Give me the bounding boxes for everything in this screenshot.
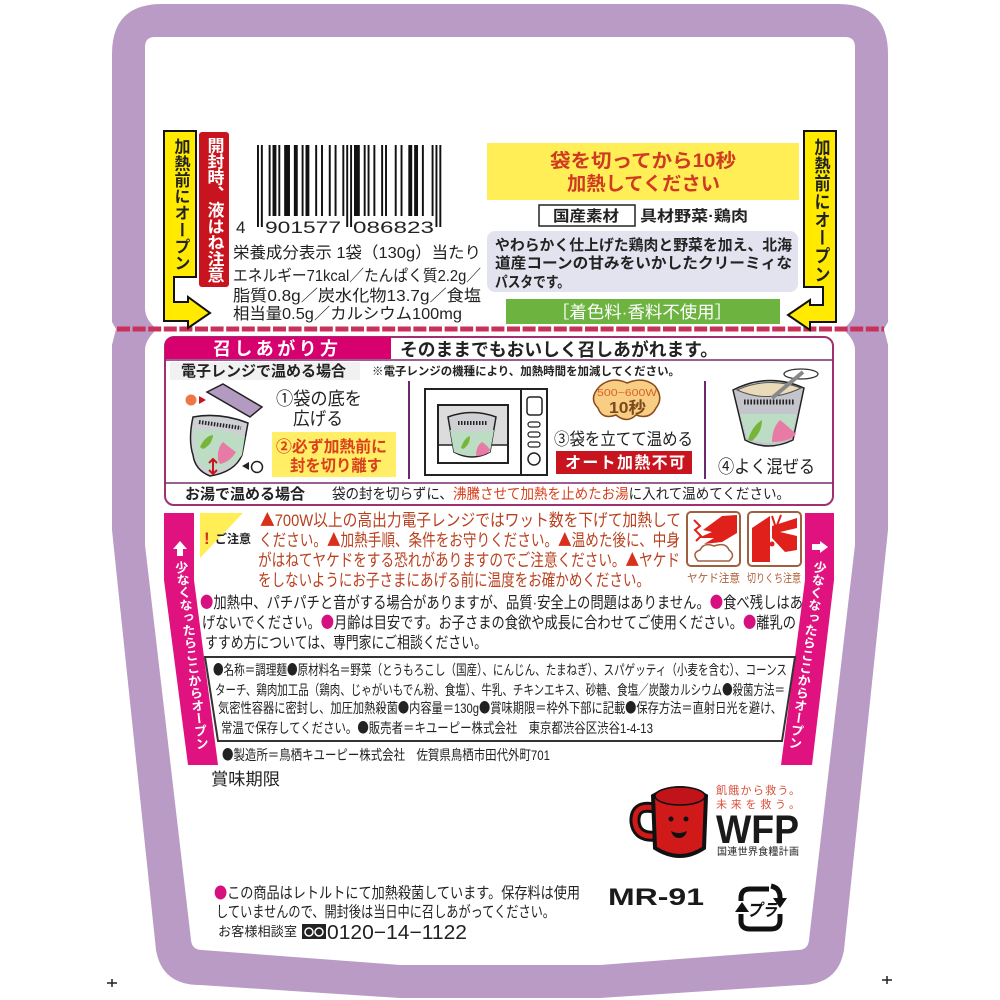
barcode: 4 xyxy=(236,218,245,237)
customer service phone: 0120−14−1122 xyxy=(327,922,467,944)
heating time cloud: 500~600W xyxy=(597,388,658,399)
microwave note: ※電子レンジの機種により、加熱時間を加減してください。 xyxy=(372,364,680,378)
left open arrow xyxy=(164,131,210,328)
pouch frame xyxy=(112,4,888,998)
icon labels: ヤケド注意 xyxy=(687,572,740,585)
best before label: 賞味期限 xyxy=(211,770,280,789)
usage notes xyxy=(200,589,803,652)
step 2 callout: 封を切り離す xyxy=(290,457,382,475)
caution flag: ! xyxy=(204,529,210,548)
caution flag xyxy=(200,513,251,558)
splash warning label xyxy=(199,132,229,287)
barcode xyxy=(236,145,441,237)
product description: パスタです。 xyxy=(495,274,570,291)
icon: sharp edge warning xyxy=(748,512,801,566)
right open strip: 少なくなったらここからオープン xyxy=(786,559,828,750)
icon labels xyxy=(687,572,801,585)
icon: plastic recycling mark: プラ xyxy=(747,901,778,920)
retort note: していませんので、開封後は当日中に召しあがってください。 xyxy=(216,903,555,921)
ingredient box: ●名称＝調理麺●原材料名＝野菜（とうもろこし（国産）、にんじん、たまねぎ）、スパゲッティ（小麦を含む）、コーンス xyxy=(213,660,787,680)
ingredient box: ターチ、鶏肉加工品（鶏肉、じゃがいもでん粉、食塩）、牛乳、チキンエキス、砂糖、食塩／炭酸カルシウム●殺菌方法＝ xyxy=(215,680,785,700)
splash warning label: 開封時、液はね注意 xyxy=(204,137,224,283)
WFP logo text xyxy=(716,783,800,858)
caution flag: ご注意 xyxy=(215,531,251,546)
no auto heating label: オート加熱不可 xyxy=(565,454,685,472)
caution text: ください。▲加熱手順、条件をお守りください。▲温めた後に、中身 xyxy=(259,526,680,551)
step 1: ①袋の底を xyxy=(276,385,362,411)
how to eat tagline: そのままでもおいしく召しあがれます。 xyxy=(400,339,718,360)
icon labels: 切りくち注意 xyxy=(747,572,801,585)
step 1 xyxy=(276,385,362,429)
barcode: 901577 xyxy=(265,218,341,237)
product description xyxy=(487,231,798,292)
product code: MR-91 xyxy=(608,884,704,911)
usage notes: すすめ方については、専門家にご相談ください。 xyxy=(205,634,487,652)
left open strip: 少なくなったらここからオープン xyxy=(172,560,209,751)
left crop mark xyxy=(107,979,117,987)
right open strip xyxy=(781,513,834,765)
caution text: をしないようにお子さまにあげる前に温度をお確かめください。 xyxy=(258,571,650,590)
icon: WFP red cup xyxy=(635,787,706,856)
caution text: ▲700W以上の高出力電子レンジではワット数を下げて加熱して xyxy=(260,506,681,531)
yellow heating note: 加熱してください xyxy=(567,173,720,195)
no additives banner xyxy=(506,299,780,324)
WFP logo text: 飢餓から救う。 xyxy=(716,783,800,797)
WFP logo text: 国連世界食糧計画 xyxy=(717,845,799,858)
icon: burn warning xyxy=(687,512,740,566)
right crop mark xyxy=(882,976,892,984)
product description: やわらかく仕上げた鶏肉と野菜を加え、北海 xyxy=(495,236,792,254)
hot water heading: お湯で温める場合 xyxy=(185,486,305,503)
nutrition facts: 栄養成分表示 1袋（130g）当たり xyxy=(233,244,481,262)
right open arrow: 加熱前にオープン xyxy=(812,138,830,283)
icon: pouch with cut corner xyxy=(186,384,262,476)
yellow heating note: 袋を切ってから10秒 xyxy=(550,150,736,172)
usage notes: げないでください。●月齢は目安です。お子さまの食欲や成長に合わせてご使用ください。●離乳の xyxy=(202,609,796,633)
hot water instructions: 袋の封を切らずに、沸騰させて加熱を止めたお湯に入れて温めてください。 xyxy=(332,485,790,503)
domestic ingredients tag xyxy=(539,205,748,226)
how to eat heading xyxy=(165,337,391,359)
microwave heading: 電子レンジで温める場合 xyxy=(181,363,346,380)
step 2 callout: ②必ず加熱前に xyxy=(276,433,387,457)
icon: stirring pouch xyxy=(733,369,818,446)
nutrition facts xyxy=(233,244,481,323)
step 3: ③袋を立てて温める xyxy=(554,425,693,450)
yellow heating note xyxy=(487,143,799,200)
left open arrow: 加熱前にオープン xyxy=(172,138,190,271)
heating time cloud: 10秒 xyxy=(609,399,646,417)
right open arrow xyxy=(788,131,836,330)
product description: 道産コーンの甘みをいかしたクリーミィな xyxy=(495,254,792,272)
nutrition facts: 脂質0.8g／炭水化物13.7g／食塩 xyxy=(233,287,481,305)
left open strip xyxy=(164,513,218,765)
nutrition facts: 相当量0.5g／カルシウム100mg xyxy=(233,305,462,323)
WFP logo text: WFP xyxy=(716,808,799,852)
tear line xyxy=(117,326,884,332)
caution text: がはねてヤケドをする恐れがありますのでご注意ください。▲ヤケド xyxy=(258,546,680,571)
manufacturer line: ●製造所＝鳥栖キユーピー株式会社 佐賀県鳥栖市田代外町701 xyxy=(222,745,550,765)
caution text xyxy=(258,506,681,590)
icon: plastic recycling mark xyxy=(735,886,787,929)
no additives banner: ［着色料·香料不使用］ xyxy=(552,302,732,322)
usage notes: ●加熱中、パチパチと音がする場合がありますが、品質·安全上の問題はありません。●食べ残しはあ xyxy=(200,589,803,613)
domestic ingredients tag: 国産素材 xyxy=(553,207,619,225)
customer service phone: お客様相談室 xyxy=(218,924,297,939)
customer service phone xyxy=(218,922,467,944)
heating time cloud xyxy=(593,380,660,420)
step 2 callout xyxy=(272,432,396,477)
retort note: ●この商品はレトルトにて加熱殺菌しています。保存料は使用 xyxy=(214,881,580,903)
nutrition facts: エネルギー71kcal／たんぱく質2.2g／ xyxy=(233,267,481,285)
ingredient box: 常温で保存してください。●販売者＝キユーピー株式会社 東京都渋谷区渋谷1-4-13 xyxy=(221,718,653,738)
icon: microwave xyxy=(425,389,547,475)
barcode: 086823 xyxy=(353,218,434,237)
ingredient box: 気密性容器に密封し、加圧加熱殺菌●内容量＝130g●賞味期限＝枠外下部に記載●保存方法＝直射日光を避け、 xyxy=(218,698,782,718)
how to eat heading: 召しあがり方 xyxy=(213,338,338,359)
no auto heating label xyxy=(556,451,692,474)
retort note xyxy=(214,881,580,921)
WFP logo text: 未来を救う。 xyxy=(716,797,800,811)
ingredient box xyxy=(205,657,795,741)
step 4: ④よく混ぜる xyxy=(718,453,815,479)
panel: how to eat xyxy=(165,337,833,505)
domestic ingredients tag: 具材野菜·鶏肉 xyxy=(640,207,748,225)
step 1: 広げる xyxy=(293,409,343,429)
